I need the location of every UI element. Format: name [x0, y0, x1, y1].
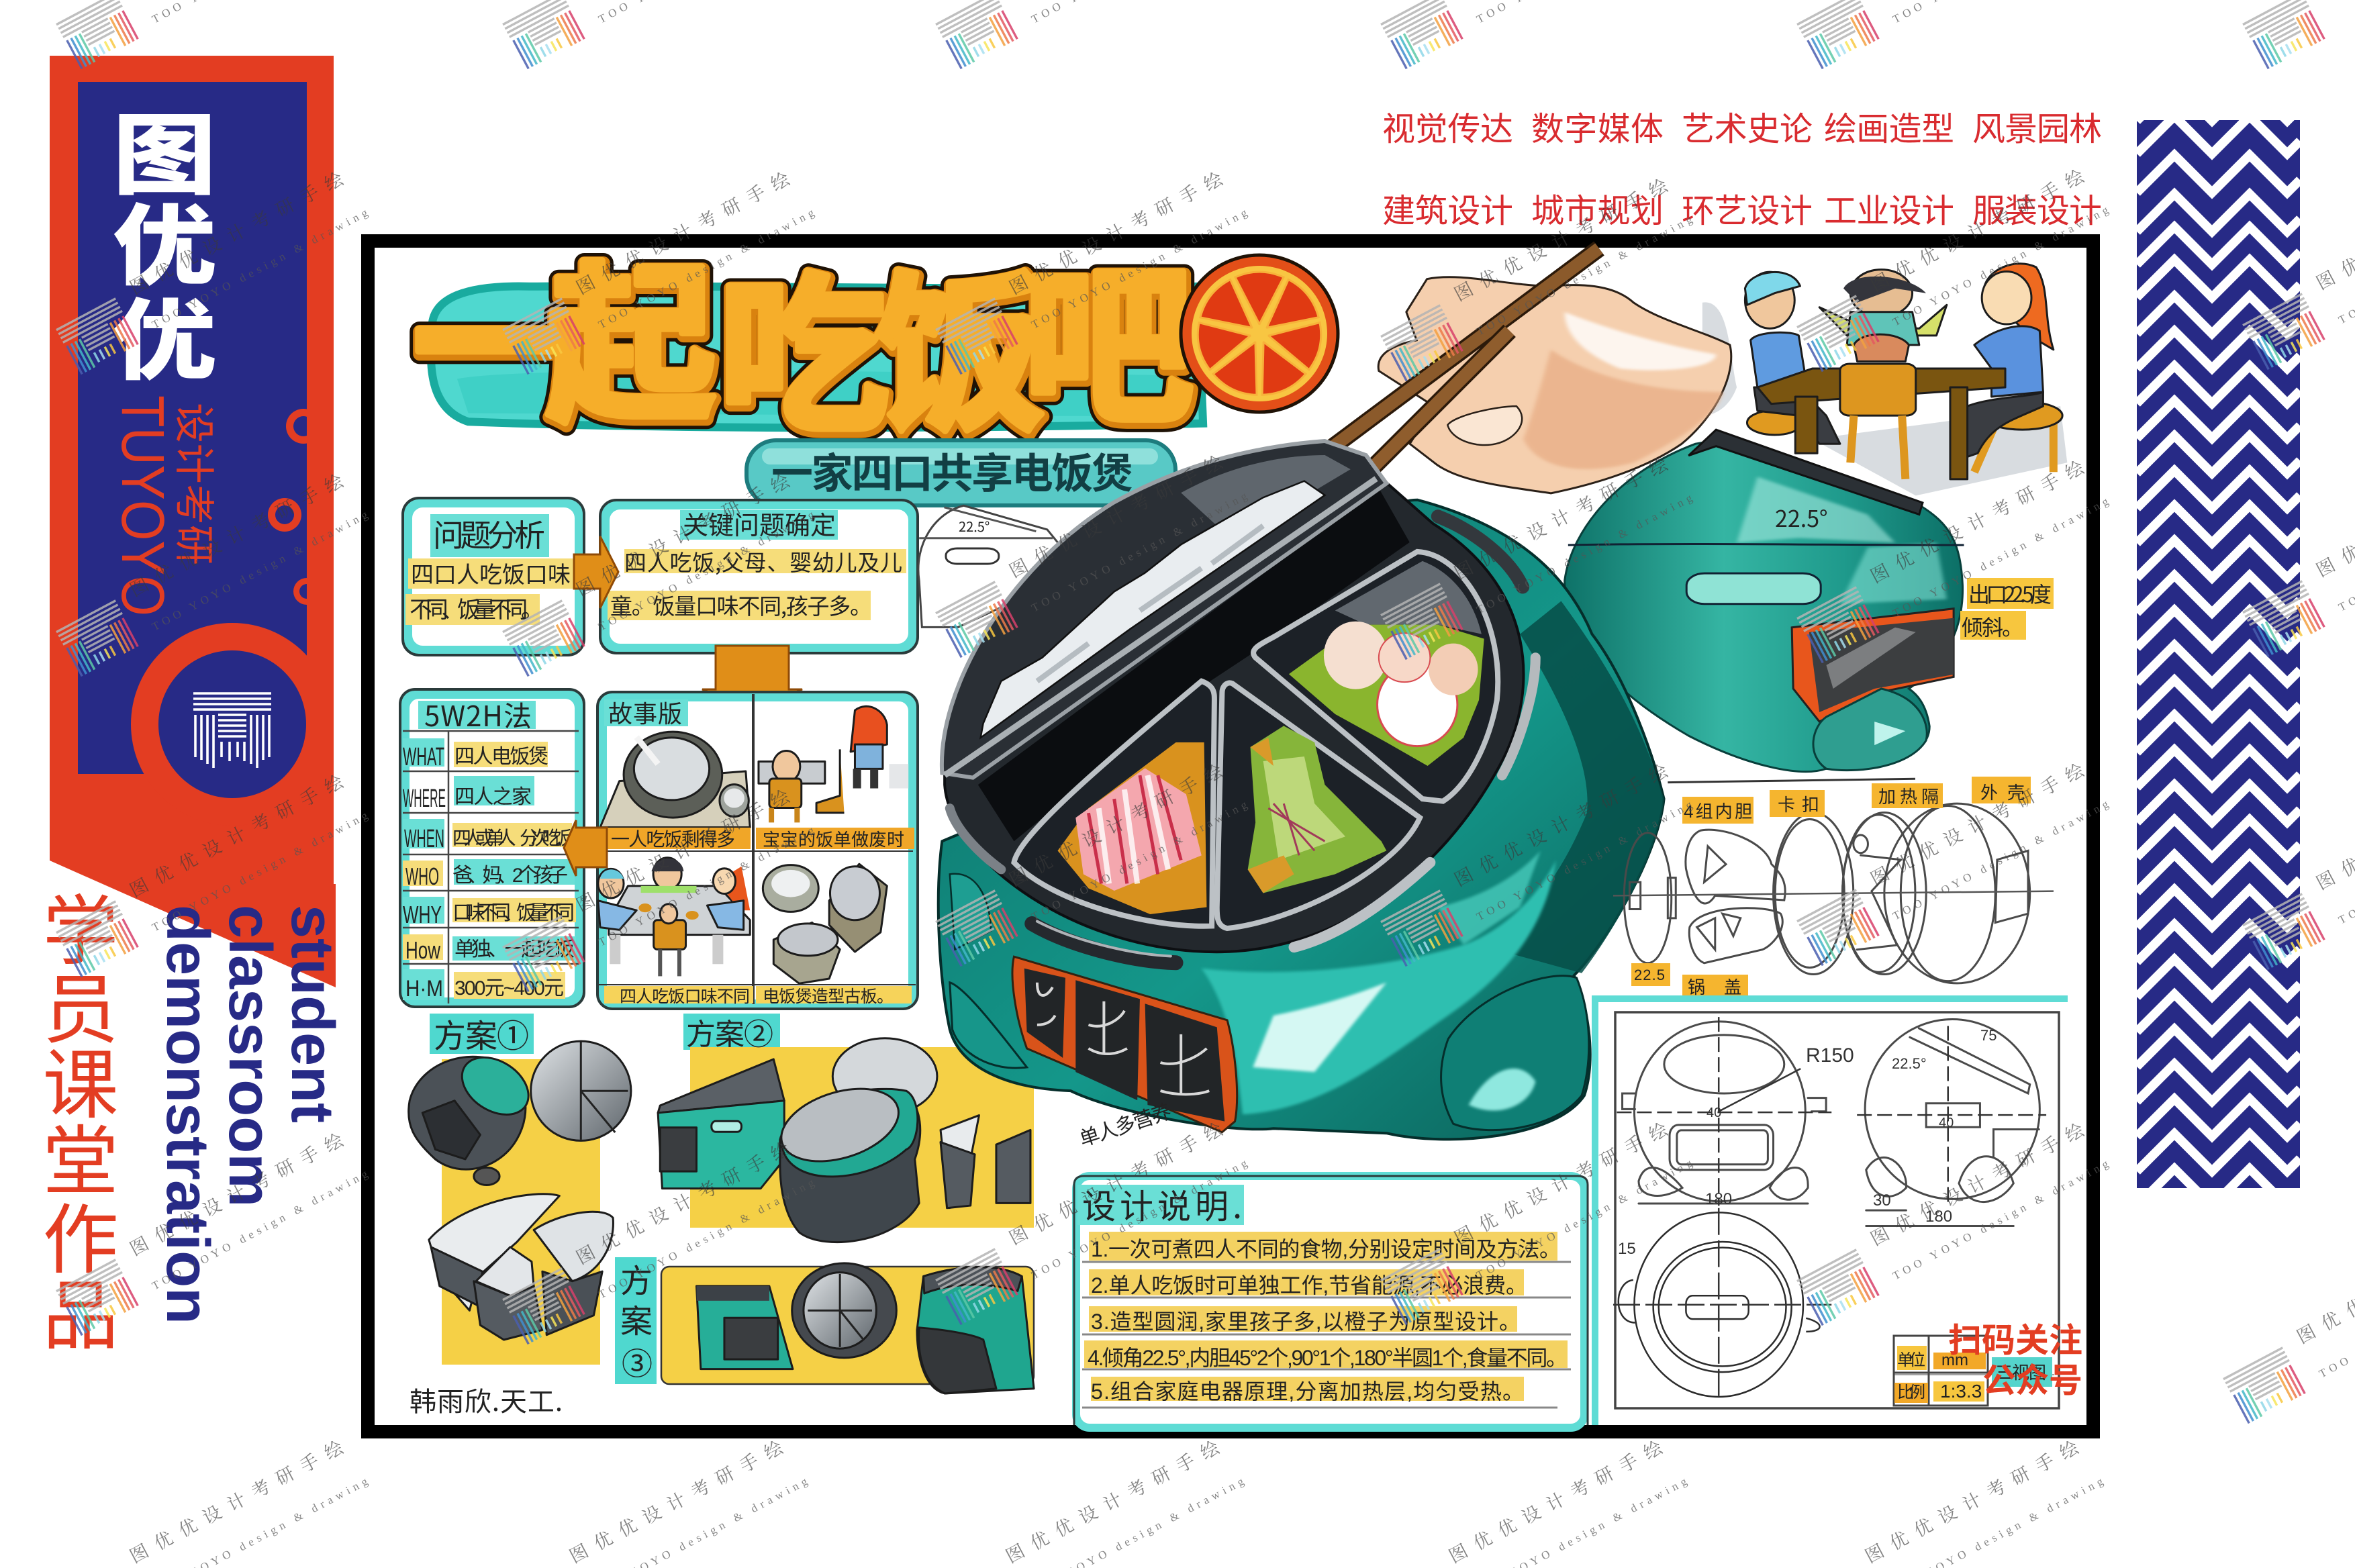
text block: design majors: 工业设计 — [1824, 193, 1954, 230]
watermark overlay: 图优优设计考研手绘 — [571, 467, 794, 601]
watermark overlay: TOO YOYO design & drawing — [1474, 491, 1694, 616]
top view — [1613, 1208, 1831, 1399]
label: 22.5 on side cooker: 22.5° — [1775, 501, 1828, 534]
watermark overlay: TOO YOYO design & drawing — [150, 508, 370, 633]
panel: 5W2H: 四人之家 — [454, 786, 532, 808]
cooker rim — [945, 464, 1523, 952]
heading: english classroom captions: demonstration — [154, 905, 221, 1324]
title: 一起吃饭吧: 饭 — [875, 260, 1047, 452]
icon: orange slice — [1181, 255, 1338, 412]
panel: storyboard: 故事版 — [608, 695, 682, 730]
exploded labels: 锅盖 — [1688, 977, 1741, 997]
panel: key problem: 四人吃饭,父母、婴幼儿及儿 — [624, 545, 902, 577]
title: 一起吃饭吧: 吧 — [1024, 255, 1196, 446]
front control panel — [1012, 957, 1237, 1132]
dimensions — [1618, 1027, 1997, 1258]
title: 一起吃饭吧: 一 — [413, 255, 585, 446]
exploded labels: 外壳 — [1980, 783, 2025, 803]
watermark overlay: TOO YOYO design & drawing — [1029, 206, 1249, 331]
cooker body — [939, 500, 1664, 1139]
label: 22.5: 22.5° — [959, 516, 990, 536]
watermark overlay: 图优优设计考研手绘 — [1004, 164, 1227, 299]
story bottom caption — [599, 983, 916, 1008]
brand subtitle: 设计考研 — [171, 403, 216, 565]
banner notch rings — [268, 403, 334, 618]
compartment: center — [1217, 683, 1420, 928]
panel: problem analysis: 四口人吃饭口味 — [411, 556, 571, 589]
description panel: 设计说明. — [1082, 1180, 1242, 1228]
watermark overlay: TOO YOYO design & drawing — [1029, 798, 1249, 923]
hinge band — [978, 488, 1410, 841]
panel: scheme 3 — [615, 1257, 1034, 1393]
watermark overlay: TOO YOYO design & drawing — [150, 1167, 370, 1292]
description panel — [1074, 1176, 1588, 1428]
arrow: left — [564, 820, 607, 876]
dimensions: 75 — [1980, 1027, 1997, 1044]
side view — [1857, 1019, 2046, 1226]
exploded labels: 卡扣 — [1778, 795, 1819, 815]
watermark overlay: 图优优设计考研手绘 — [1004, 756, 1227, 891]
watermark overlay: TOO YOYO design & drawing — [596, 1176, 816, 1301]
panel: 5W2H: 5W2H法 — [424, 694, 532, 735]
panel: 5W2H: WHERE — [403, 785, 446, 813]
watermark overlay: TOO YOYO design & drawing — [1890, 203, 2111, 328]
text block: design majors: 城市规划 — [1531, 193, 1664, 230]
description panel: 2.单人吃饭时可单独工作,节省能源,不必浪费。 — [1091, 1273, 1527, 1297]
signature: 韩雨欣.天工. — [410, 1380, 563, 1419]
watermark overlay: 图优优设计考研手绘 — [1865, 1116, 2088, 1251]
panel: 5W2H: 口味不同、饭量不同 — [452, 902, 575, 924]
watermark overlay: 图优优设计考研手绘 — [1865, 756, 2088, 891]
panel: problem analysis: 问题分析 — [433, 511, 545, 556]
exploded labels — [1631, 777, 2031, 997]
text block: design majors: 风景园林 — [1972, 111, 2102, 148]
story caption band — [604, 825, 914, 852]
panel: 5W2H: 爸、妈、2个孩子 — [452, 865, 568, 887]
watermark overlay: TOO YOYO design & drawing — [1474, 1157, 1694, 1281]
watermark overlay: TOO YOYO design & drawing — [596, 824, 816, 948]
watermark overlay: 图优优设计考研手绘 — [1443, 1433, 1666, 1568]
label: tilt note: 出口22.5度 — [1968, 578, 2052, 609]
heading: 学员课堂作品: 品 — [43, 1274, 118, 1359]
dimensions: 30 — [1873, 1191, 1891, 1210]
watermark overlay: TOO YOYO design & drawing — [150, 809, 370, 934]
watermark overlay: 图优优设计考研手绘 — [1449, 756, 1672, 891]
watermark overlay: 图优优设计考研手绘 — [571, 782, 794, 917]
panel: problem analysis — [403, 498, 584, 655]
scheme 2 sketches — [658, 1038, 1030, 1242]
brand name 图优优: 图 — [113, 107, 216, 205]
panel: 5W2H: WHY — [403, 901, 442, 928]
panel: brand banner — [50, 56, 336, 987]
story caption band: 宝宝的饭单做废时 — [763, 826, 904, 851]
compartment: right — [1253, 552, 1498, 801]
exploded view sketch — [1613, 779, 2054, 983]
panel: 5W2H: WHO — [405, 863, 439, 890]
description panel: 1.一次可煮四人不同的食物,分别设定时间及方法。 — [1091, 1237, 1561, 1261]
title: 一起吃饭吧: 饭 — [876, 263, 1048, 454]
panel: scheme 1 — [409, 1010, 631, 1365]
text block: design majors: 数字媒体 — [1531, 111, 1664, 148]
text block: design majors — [1382, 111, 2102, 230]
panel: scheme 3: 案 — [620, 1304, 653, 1340]
watermark overlay: TOO YOYO design & drawing — [1474, 798, 1694, 923]
text block: design majors: 建筑设计 — [1382, 193, 1513, 230]
callout: scan QR: 公众号 — [1982, 1362, 2082, 1400]
dimensions: 40 — [1707, 1106, 1721, 1120]
story caption band: 一人吃饭剩得多 — [611, 825, 735, 852]
panel: 5W2H: H·M — [405, 976, 443, 1001]
cooker light reflections — [950, 601, 1664, 1130]
watermark overlay: 图优优设计考研手绘 — [1449, 450, 1672, 585]
dimensions: 180 — [1925, 1208, 1952, 1226]
title: 一起吃饭吧: 起 — [546, 254, 718, 445]
watermark overlay: TOO YOYO design & drawing — [596, 508, 816, 633]
watermark overlay: TOO YOYO design & drawing — [1890, 1157, 2111, 1282]
heading: 学员课堂作品: 员 — [43, 968, 118, 1052]
callout: scan QR — [1948, 1322, 2082, 1400]
watermark overlay: 图优优设计考研手绘 — [124, 767, 347, 902]
story bottom caption: 电饭煲造型古板。 — [763, 983, 894, 1008]
exploded labels: 4组内胆 — [1684, 801, 1752, 822]
dimensions: 180 — [1705, 1190, 1732, 1208]
title: 一起吃饭吧: 吧 — [1024, 255, 1196, 446]
dimensions: R150 — [1806, 1044, 1854, 1067]
brand TUYOYO: TUYOYO — [109, 395, 176, 616]
panel: 5W2H — [400, 689, 584, 1007]
exploded labels: 加热隔 — [1878, 787, 1939, 807]
text block: design majors: 服装设计 — [1972, 193, 2102, 230]
title: 一起吃饭吧: 一 — [413, 255, 585, 446]
panel: scheme 2: 方案② — [686, 1010, 773, 1053]
exploded labels: 22.5 — [1634, 967, 1665, 983]
watermark overlay: 图优优设计考研手绘 — [571, 164, 794, 299]
watermark overlay: 图优优设计考研手绘 — [1865, 162, 2088, 297]
illustration: hand with chopsticks — [1293, 248, 1731, 509]
table: scale block: 1:3.3 — [1940, 1381, 1982, 1402]
panel: problem analysis: 不同、饭量不同。 — [410, 591, 544, 624]
panel: chevron stripe — [2137, 83, 2300, 1206]
dimensions: 40 — [1939, 1116, 1954, 1130]
table: scale block — [1894, 1336, 2054, 1406]
heading: english classroom captions — [154, 905, 346, 1324]
scheme 1 sketches — [409, 1041, 631, 1340]
watermark overlay: TOO YOYO design & drawing — [1890, 495, 2111, 620]
heading: 学员课堂作品: 课 — [43, 1043, 118, 1128]
panel: 5W2H: 300元~400元 — [454, 977, 564, 999]
title band — [431, 286, 1203, 428]
title: 一起吃饭吧: 吃 — [718, 262, 890, 453]
banner big ring — [131, 621, 334, 829]
heading: english classroom captions: student — [279, 905, 346, 1123]
panel: scheme 3: ③ — [622, 1346, 653, 1381]
watermark overlay: 图优优设计考研手绘 — [1865, 453, 2088, 588]
panel: scheme 1: 方案① — [434, 1010, 529, 1057]
watermark overlay: 图优优设计考研手绘 — [1449, 1115, 1672, 1250]
title: 一起吃饭吧: 起 — [546, 254, 718, 445]
panel: 5W2H: WHEN — [404, 825, 444, 853]
heading: 学员课堂作品 — [43, 889, 118, 1359]
title: 一起吃饭吧 — [412, 251, 1196, 456]
story scene: old cookers — [763, 864, 887, 983]
watermark overlay: 图优优设计考研手绘 — [124, 467, 347, 601]
panel: key problem — [600, 500, 918, 653]
story scene: single diner bowl — [600, 732, 750, 828]
heading: 学员课堂作品: 学 — [43, 889, 118, 974]
panel: key problem: 关键问题确定 — [683, 505, 836, 542]
illustration: family at table — [1702, 264, 2067, 495]
watermark overlay: TOO YOYO design & drawing — [1029, 1157, 1249, 1281]
heading: 学员课堂作品: 堂 — [43, 1120, 118, 1204]
story scene: child at table — [759, 706, 908, 822]
compartment: left — [1014, 681, 1214, 926]
watermark overlay: 图优优设计考研手绘 — [1004, 448, 1227, 583]
watermark overlay: 图优优设计考研手绘 — [1860, 1433, 2082, 1568]
panel: 5W2H: 四人电饭煲 — [454, 746, 548, 768]
panel: scheme 3: 方 — [620, 1264, 653, 1300]
panel: orthographic drawings — [1595, 999, 2082, 1425]
watermark overlay: 图优优设计考研手绘 — [1004, 1115, 1227, 1250]
panel: 5W2H: 单独、一起吃饭 — [454, 938, 575, 961]
watermark overlay: TOO YOYO design & drawing — [1029, 489, 1249, 614]
description panel: 4.倾角22.5°,内胆45°2个,90°1个,180°半圆1个,食量不同。 — [1088, 1346, 1568, 1370]
watermark overlay: TOO YOYO design & drawing — [596, 206, 816, 331]
text block: design majors: 环艺设计 — [1682, 193, 1813, 230]
brand name 图优优 — [113, 107, 216, 391]
watermark overlay: 图优优设计考研手绘 — [124, 164, 347, 299]
illustration: side view cooker — [1565, 430, 1964, 772]
open lid with rice — [942, 441, 1386, 778]
table: scale block: 单位 — [1897, 1351, 1925, 1369]
label: tilt note — [1960, 578, 2054, 642]
watermark overlay: 图优优设计考研手绘 — [1000, 1433, 1223, 1568]
dimensions: 22.5° — [1892, 1055, 1927, 1072]
watermark overlay: 图优优设计考研手绘 — [1449, 171, 1672, 306]
label: tilt note: 倾斜。 — [1962, 611, 2023, 642]
watermark overlay: TOO YOYO design & drawing — [1474, 213, 1694, 338]
watermark overlay: 图优优设计考研手绘 — [124, 1433, 347, 1568]
panel: key problem: 童。饭量口味不同,孩子多。 — [610, 589, 872, 621]
table: scale block: 比例 — [1897, 1383, 1925, 1402]
description panel: 3.造型圆润,家里孩子多,以橙子为原型设计。 — [1091, 1310, 1521, 1334]
title: 一起吃饭吧: 起 — [545, 251, 717, 442]
illustration: main rice cooker — [939, 441, 1664, 1139]
scheme 3 sketches — [696, 1263, 1034, 1393]
watermark overlay: 图优优设计考研手绘 — [124, 1126, 347, 1261]
title: 一起吃饭吧: 吧 — [1022, 252, 1194, 444]
title: 一起吃饭吧: 饭 — [876, 263, 1048, 454]
title: 一起吃饭吧: 一 — [412, 252, 583, 444]
callout: scan QR: 扫码关注 — [1948, 1322, 2082, 1359]
label: single-serve note: 单人多营养 — [1075, 1095, 1175, 1153]
text block: design majors: 视觉传达 — [1382, 111, 1513, 148]
title: 一起吃饭吧: 吃 — [719, 264, 891, 456]
text block: design majors: 艺术史论 — [1682, 111, 1813, 148]
panel: storyboard — [564, 692, 918, 1009]
front view — [1617, 1017, 1831, 1206]
watermark overlay: 图优优设计考研手绘 — [564, 1433, 787, 1568]
story bottom caption: 四人吃饭口味不同 — [620, 983, 750, 1008]
brand name 图优优: 优 — [113, 198, 216, 296]
table: scale block: mm — [1941, 1351, 1968, 1369]
icon: white stripe logo — [193, 693, 271, 768]
table: scale block: 三视图 — [1995, 1363, 2046, 1383]
subtitle pill: 一家四口共享电饭煲 — [771, 440, 1133, 500]
dimensions: 15 — [1618, 1240, 1636, 1258]
panel: 5W2H: 四人或单人、分次吃饭 — [452, 828, 572, 848]
heading: 学员课堂作品: 作 — [43, 1198, 118, 1283]
panel: 5W2H: How — [405, 936, 441, 964]
watermark overlay: 图优优设计考研手绘 — [571, 1134, 794, 1269]
title: 一起吃饭吧: 吃 — [719, 264, 891, 456]
panel: 5W2H: WHAT — [403, 743, 444, 771]
story scene: family table — [598, 858, 750, 976]
small sketch: lid detail — [918, 505, 1081, 627]
panel: scheme 2 — [658, 1010, 1034, 1242]
text block: design majors: 绘画造型 — [1824, 111, 1954, 148]
description panel: 5.组合家庭电器原理,分离加热层,均匀受热。 — [1091, 1379, 1524, 1404]
heading: english classroom captions: classroom — [216, 905, 283, 1207]
watermark overlay: TOO YOYO design & drawing — [1890, 797, 2111, 922]
watermark overlay: TOO YOYO design & drawing — [150, 206, 370, 331]
brand name 图优优: 优 — [113, 293, 216, 391]
arrow: down — [702, 646, 802, 711]
arrow: right — [574, 536, 618, 608]
